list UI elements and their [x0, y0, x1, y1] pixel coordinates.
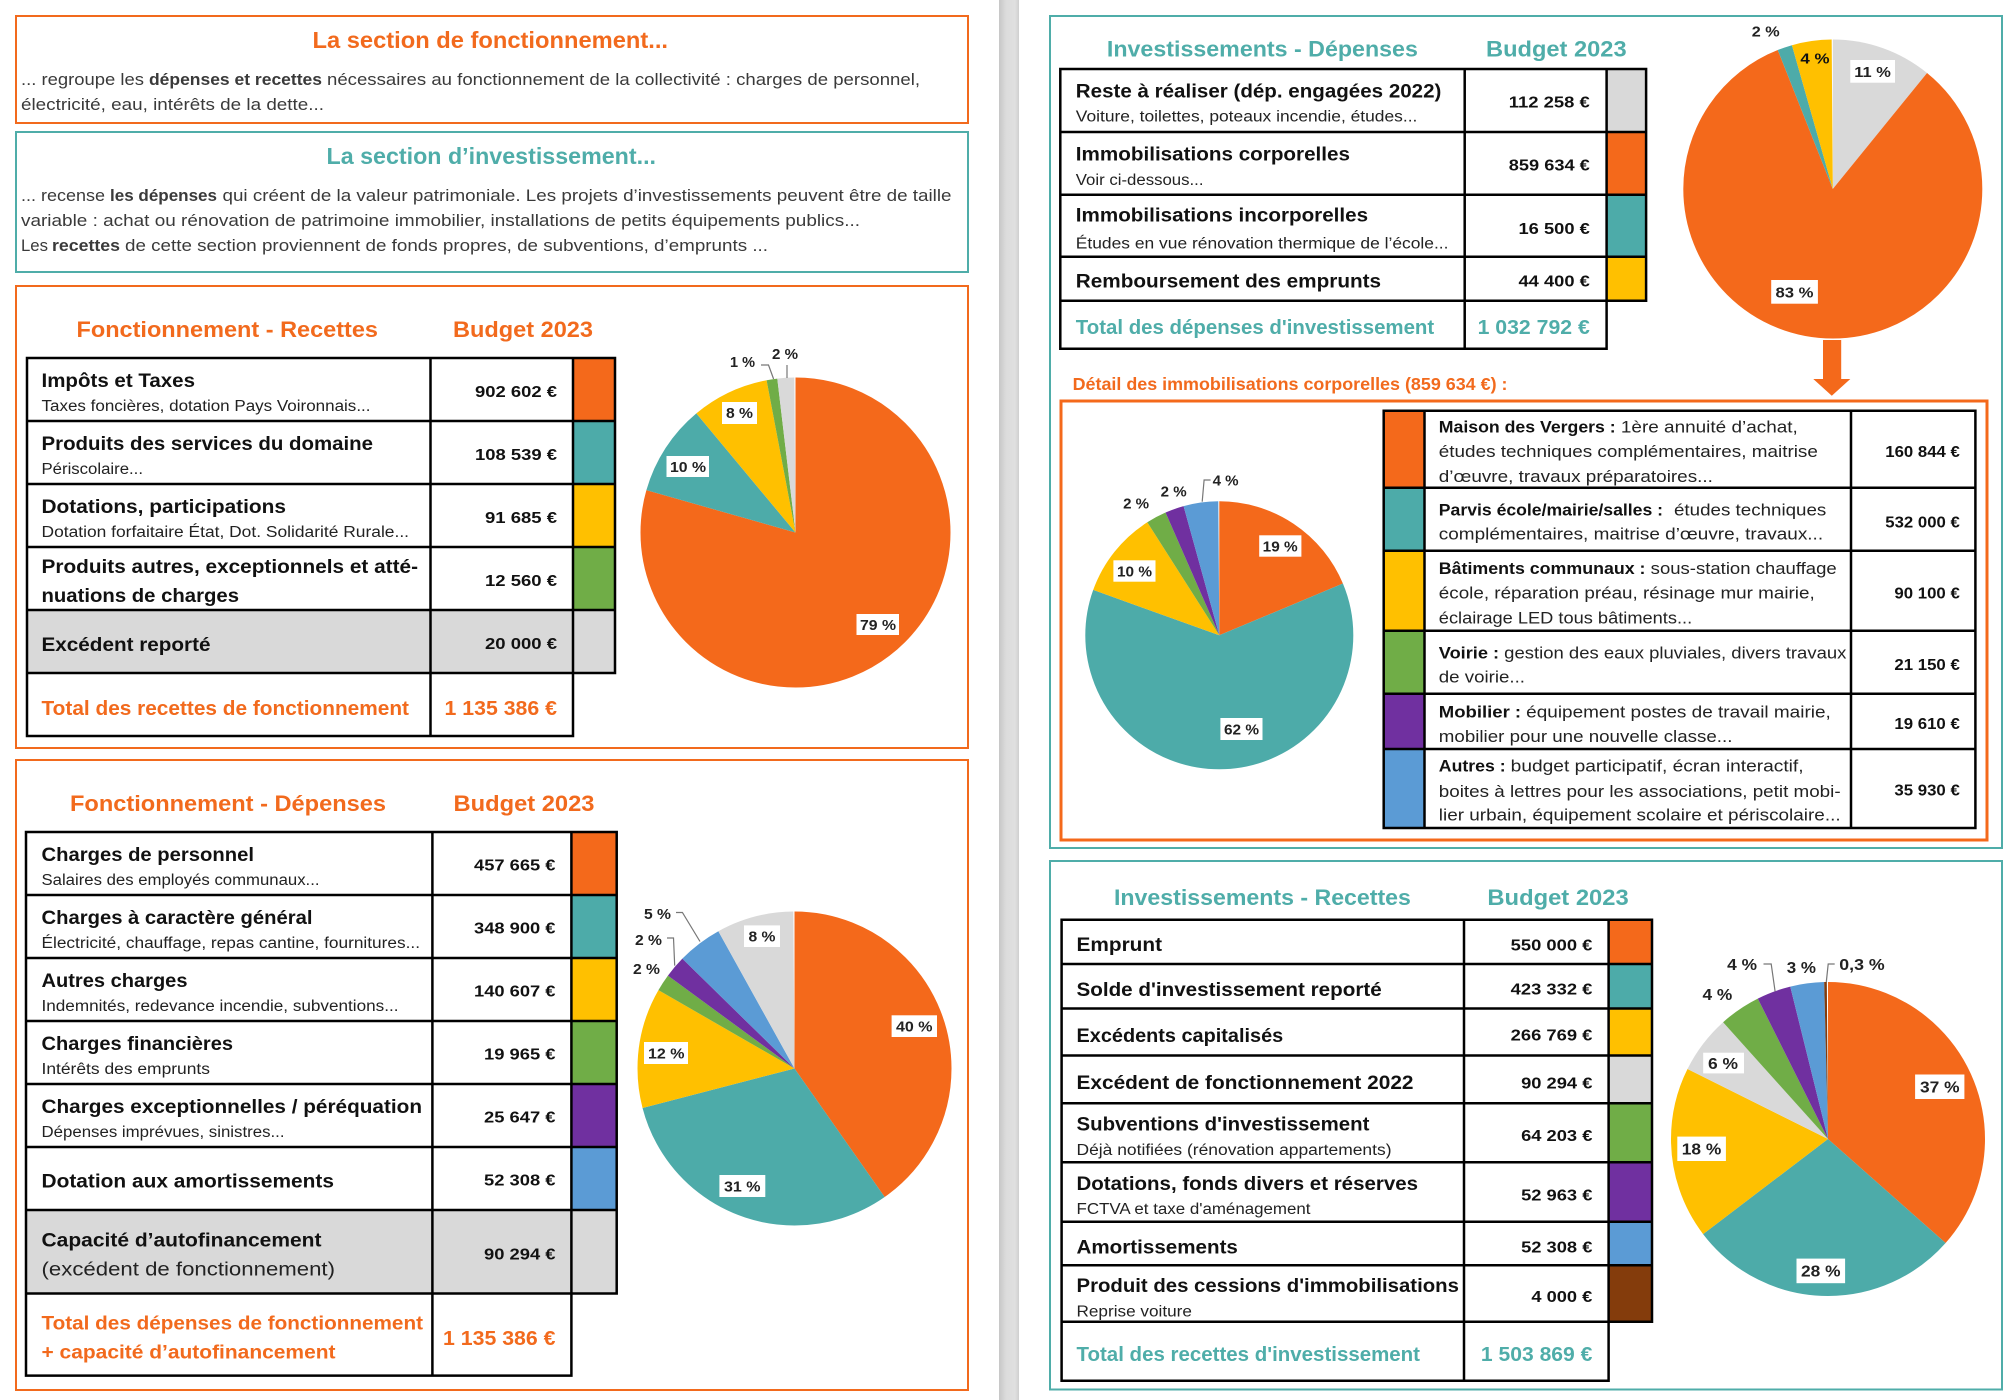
row: parvis école	[1439, 500, 1960, 543]
row: parvis école: Parvis école/mairie/salles :	[1439, 500, 1663, 519]
pie chart: dépenses d'investissement: 11 %	[1854, 64, 1891, 81]
row: autres: 35 930 €	[1894, 783, 1960, 800]
row: charges à caractère général: Électricité, chauffage, repas cantine, fournitures...	[42, 935, 420, 952]
row: total recettes de fonctionnement: 1 135 386 €	[444, 697, 558, 720]
row: dotations, fonds divers: Dotations, fonds divers et réserves	[1076, 1174, 1418, 1195]
row: produits autres	[42, 557, 557, 607]
panel: investissements recettes	[1050, 861, 2002, 1390]
row: mobilier	[1439, 702, 1960, 746]
pie chart: dépenses d'investissement	[1752, 24, 1908, 304]
row: produit des cessions: Produit des cessions d'immobilisations	[1076, 1276, 1459, 1297]
row: mobilier: Mobilier :	[1439, 702, 1521, 721]
row: emprunt	[1076, 935, 1593, 956]
pie chart: dépenses de fonctionnement	[633, 906, 937, 1197]
text block: fonctionnement description: ... regroupe les	[21, 71, 144, 89]
row: total dépenses de fonctionnement: Total des dépenses de fonctionnement	[42, 1312, 424, 1334]
pie chart: recettes de fonctionnement: 10 %	[670, 459, 706, 476]
row: produits autres: 12 560 €	[485, 573, 557, 590]
row: immobilisations corporelles: 859 634 €	[1509, 158, 1590, 175]
pie chart: recettes d'investissement: 37 %	[1920, 1080, 1960, 1096]
row: dotations, fonds divers: 52 963 €	[1521, 1187, 1593, 1204]
pie chart: dépenses de fonctionnement: 12 %	[648, 1046, 684, 1062]
heading: budget 2023: Budget 2023	[1486, 36, 1627, 62]
row: dotation aux amortissements: Dotation aux amortissements	[42, 1172, 334, 1192]
row: bâtiments communaux: Bâtiments communaux :	[1439, 559, 1646, 578]
panel: la section d'investissement	[16, 132, 968, 272]
row: excédent de fonctionnement 2022: 90 294 €	[1521, 1076, 1593, 1092]
row: maison des vergers: d’œuvre, travaux préparatoires...	[1439, 467, 1713, 486]
row: impôts et taxes: 902 602 €	[475, 384, 557, 401]
row: amortissements: Amortissements	[1076, 1237, 1238, 1258]
pie chart: recettes d'investissement: 3 %	[1787, 960, 1816, 977]
row: produits des services: Produits des services du domaine	[42, 434, 373, 455]
pie chart: dépenses de fonctionnement: 2 %	[633, 961, 660, 978]
row: mobilier: mobilier pour une nouvelle classe...	[1439, 727, 1732, 746]
row: voirie: gestion des eaux pluviales, divers travaux	[1504, 643, 1847, 662]
row: remboursement des emprunts: Remboursement des emprunts	[1076, 271, 1381, 292]
row: emprunt: Emprunt	[1076, 935, 1163, 956]
row: reste à réaliser: Voiture, toilettes, poteaux incendie, études...	[1076, 109, 1417, 126]
row: amortissements: 52 308 €	[1521, 1239, 1593, 1256]
row: remboursement des emprunts	[1076, 271, 1590, 292]
row: capacité d'autofinancement: 90 294 €	[484, 1246, 556, 1264]
row: produit des cessions	[1076, 1276, 1592, 1320]
row: total dépenses de fonctionnement: 1 135 386 €	[443, 1327, 556, 1350]
row: charges financières: Intérêts des emprunts	[42, 1061, 210, 1078]
row: immobilisations incorporelles: Immobilisations incorporelles	[1076, 206, 1368, 227]
row: total dépenses d'investissement	[1076, 316, 1590, 339]
row: autres: boites à lettres pour les associations, petit mobi-	[1439, 782, 1841, 801]
text block: investissement description: variable : achat ou rénovation de patrimoine immobilier, installations de petits équipements publics...	[21, 212, 860, 230]
table: dépenses de fonctionnement	[26, 832, 617, 1376]
row: excédents capitalisés: 266 769 €	[1511, 1028, 1593, 1044]
row: total dépenses d'investissement: Total des dépenses d'investissement	[1076, 316, 1434, 339]
table: recettes de fonctionnement	[27, 358, 615, 736]
row: total recettes d'investissement: 1 503 869 €	[1481, 1343, 1593, 1366]
row: bâtiments communaux: éclairage LED tous bâtiments...	[1439, 608, 1692, 627]
row: excédent reporté: 20 000 €	[485, 636, 557, 653]
row: emprunt: 550 000 €	[1511, 937, 1593, 954]
row: immobilisations corporelles: Voir ci-dessous...	[1076, 172, 1204, 189]
row: reste à réaliser: Reste à réaliser (dép. engagées 2022)	[1076, 81, 1441, 102]
panel: fonctionnement recettes	[16, 286, 968, 748]
row: produits des services: 108 539 €	[475, 447, 557, 464]
row: capacité d'autofinancement	[42, 1230, 556, 1280]
pie chart: recettes de fonctionnement: 79 %	[860, 617, 896, 634]
row: voirie: 21 150 €	[1894, 657, 1960, 674]
row: produit des cessions: 4 000 €	[1531, 1289, 1592, 1306]
pie chart: recettes d'investissement	[1677, 957, 1964, 1283]
pie chart: recettes de fonctionnement	[666, 346, 899, 635]
row: dotations, fonds divers	[1076, 1174, 1593, 1218]
heading: budget 2023: Budget 2023	[1487, 885, 1629, 910]
row: solde d'investissement reporté	[1076, 980, 1593, 1001]
pie chart: recettes de fonctionnement: 8 %	[726, 405, 753, 422]
row: dotations: Dotation forfaitaire État, Dot. Solidarité Rurale...	[42, 524, 409, 541]
text block: fonctionnement description	[21, 71, 920, 114]
row: dotations, fonds divers: FCTVA et taxe d'aménagement	[1076, 1201, 1311, 1218]
row: autres: budget participatif, écran interactif,	[1511, 756, 1804, 775]
row: charges à caractère général	[42, 908, 556, 952]
row: mobilier: 19 610 €	[1894, 716, 1960, 733]
text block: investissement description	[21, 187, 952, 255]
row: charges financières: 19 965 €	[484, 1046, 556, 1064]
row: produit des cessions: Reprise voiture	[1076, 1304, 1192, 1320]
pie chart: immobilisations corporelles: 19 %	[1263, 538, 1298, 556]
row: voirie: de voirie...	[1439, 668, 1525, 687]
row: autres	[1439, 756, 1960, 825]
row: immobilisations incorporelles: Études en vue rénovation thermique de l’école...	[1076, 235, 1448, 252]
row: maison des vergers: 160 844 €	[1885, 444, 1960, 461]
heading: budget 2023: Budget 2023	[453, 317, 593, 342]
row: charges à caractère général: 348 900 €	[474, 920, 556, 938]
row: parvis école: études techniques	[1674, 500, 1826, 519]
row: bâtiments communaux: 90 100 €	[1894, 585, 1960, 602]
row: charges de personnel: Salaires des employés communaux...	[42, 872, 320, 889]
table: recettes d'investissement	[1062, 920, 1652, 1381]
text block: investissement description: Les	[21, 237, 48, 255]
row: solde d'investissement reporté: Solde d'investissement reporté	[1076, 980, 1382, 1001]
pie chart: recettes d'investissement: 6 %	[1708, 1056, 1738, 1073]
text block: investissement description: recettes	[52, 237, 120, 255]
heading: fonctionnement dépenses: Fonctionnement - Dépenses	[70, 791, 386, 816]
row: reste à réaliser	[1076, 81, 1590, 126]
row: immobilisations incorporelles: 16 500 €	[1518, 221, 1590, 238]
pie chart: dépenses d'investissement: 2 %	[1752, 24, 1780, 41]
pie chart: recettes d'investissement: 18 %	[1682, 1142, 1721, 1158]
row: autres charges: Autres charges	[42, 971, 188, 992]
row: dotation aux amortissements	[42, 1172, 556, 1192]
heading: budget 2023: Budget 2023	[454, 791, 594, 816]
row: charges à caractère général: Charges à caractère général	[42, 908, 312, 929]
row: dotations: Dotations, participations	[42, 497, 286, 518]
text block: investissement description: les dépenses	[110, 187, 217, 205]
row: dotations	[42, 497, 557, 541]
row: autres charges: 140 607 €	[474, 984, 556, 1000]
heading: section de fonctionnement: La section de fonctionnement...	[312, 27, 668, 53]
panel: détail des immobilisations	[1061, 401, 1987, 840]
text block: fonctionnement description: électricité, eau, intérêts de la dette...	[21, 96, 324, 114]
row: solde d'investissement reporté: 423 332 €	[1511, 982, 1593, 998]
row: subventions d'investissement: 64 203 €	[1521, 1128, 1593, 1145]
row: charges financières: Charges financières	[42, 1034, 233, 1055]
row: immobilisations incorporelles	[1076, 206, 1590, 252]
text block: investissement description: qui créent de la valeur patrimoniale. Les projets d’investissements peuvent être de taille	[222, 187, 952, 205]
row: mobilier: équipement postes de travail mairie,	[1526, 702, 1831, 721]
row: maison des vergers	[1439, 417, 1960, 486]
pie chart: dépenses de fonctionnement: 31 %	[724, 1178, 760, 1196]
text block: investissement description: de cette section proviennent de fonds propres, de subventions, d’emprunts ...	[125, 237, 768, 255]
heading: section d'investissement: La section d’investissement...	[326, 143, 656, 169]
row: immobilisations corporelles	[1076, 145, 1590, 189]
row: excédent reporté	[42, 635, 557, 656]
pie chart: immobilisations corporelles: 4 %	[1213, 473, 1239, 490]
row: capacité d'autofinancement: Capacité d’autofinancement	[42, 1230, 322, 1252]
arrow: vers le détail	[1813, 340, 1850, 396]
row: total recettes d'investissement	[1076, 1343, 1593, 1366]
pie chart: immobilisations corporelles: 10 %	[1117, 564, 1152, 580]
heading: détail des immobilisations corporelles: Détail des immobilisations corporelles (859 634 €) :	[1073, 374, 1508, 394]
pie chart: immobilisations corporelles	[1113, 473, 1301, 740]
row: subventions d'investissement: Subventions d'investissement	[1076, 1114, 1370, 1135]
pie chart: dépenses de fonctionnement: 40 %	[896, 1018, 932, 1036]
row: parvis école: 532 000 €	[1885, 514, 1960, 531]
row: dotations: 91 685 €	[485, 510, 557, 527]
row: impôts et taxes: Taxes foncières, dotation Pays Voironnais...	[42, 398, 370, 415]
row: immobilisations corporelles: Immobilisations corporelles	[1076, 145, 1350, 166]
row: produits des services	[42, 434, 557, 478]
pie chart: immobilisations corporelles: 62 %	[1224, 722, 1259, 738]
row: autres: Autres :	[1439, 756, 1506, 775]
row: impôts et taxes	[42, 371, 557, 415]
row: excédent de fonctionnement 2022	[1076, 1073, 1593, 1094]
panel: fonctionnement dépenses	[16, 760, 968, 1390]
heading: fonctionnement recettes: Fonctionnement - Recettes	[76, 317, 378, 342]
row: excédents capitalisés	[1076, 1026, 1593, 1047]
pie chart: recettes de fonctionnement: 1 %	[730, 354, 755, 371]
row: produits autres: Produits autres, exceptionnels et atté-	[42, 557, 418, 578]
heading: investissements dépenses: Investissements - Dépenses	[1107, 36, 1418, 62]
row: excédent reporté: Excédent reporté	[42, 635, 211, 656]
row: subventions d'investissement: Déjà notifiées (rénovation appartements)	[1076, 1142, 1392, 1159]
text block: fonctionnement description: nécessaires au fonctionnement de la collectivité : charges de personnel,	[327, 71, 920, 89]
row: total dépenses d'investissement: 1 032 792 €	[1478, 316, 1590, 339]
pie chart: recettes d'investissement: 0,3 %	[1839, 957, 1885, 974]
row: bâtiments communaux	[1439, 559, 1960, 627]
row: bâtiments communaux: école, réparation préau, résinage mur mairie,	[1439, 583, 1815, 602]
row: autres: lier urbain, équipement scolaire et périscolaire...	[1439, 806, 1841, 825]
pie chart: dépenses de fonctionnement: 5 %	[644, 906, 671, 923]
row: parvis école: complémentaires, maitrise d’œuvre, travaux...	[1439, 524, 1823, 543]
row: reste à réaliser: 112 258 €	[1509, 95, 1590, 112]
table: dépenses d'investissement	[1060, 69, 1646, 349]
row: dotation aux amortissements: 52 308 €	[484, 1172, 556, 1190]
row: excédent de fonctionnement 2022: Excédent de fonctionnement 2022	[1076, 1073, 1414, 1094]
pie chart: dépenses de fonctionnement: 2 %	[635, 932, 662, 949]
panel: la section de fonctionnement	[16, 16, 968, 123]
row: autres charges: Indemnités, redevance incendie, subventions...	[42, 998, 398, 1015]
row: impôts et taxes: Impôts et Taxes	[42, 371, 195, 392]
row: charges exceptionnelles: Charges exceptionnelles / péréquation	[42, 1097, 422, 1118]
pie chart: dépenses de fonctionnement: 8 %	[748, 928, 776, 946]
row: total dépenses de fonctionnement: + capacité d’autofinancement	[42, 1342, 336, 1364]
row: voirie: Voirie :	[1439, 643, 1499, 662]
row: charges exceptionnelles: Dépenses imprévues, sinistres...	[42, 1124, 284, 1141]
text block: investissement description: ... recense	[21, 187, 105, 205]
panel: investissements dépenses	[1050, 16, 2002, 848]
pie chart: immobilisations corporelles: 2 %	[1161, 484, 1187, 501]
row: charges financières	[42, 1034, 556, 1078]
row: amortissements	[1076, 1237, 1593, 1258]
row: charges de personnel	[42, 845, 556, 889]
table: détail des immobilisations	[1384, 411, 1975, 828]
page gutter	[999, 0, 1019, 1400]
row: maison des vergers: Maison des Vergers :	[1439, 417, 1616, 436]
row: bâtiments communaux: sous-station chauffage	[1651, 559, 1837, 578]
pie chart: dépenses d'investissement: 4 %	[1800, 50, 1830, 67]
pie chart: dépenses d'investissement: 83 %	[1776, 284, 1814, 302]
pie chart: immobilisations corporelles: 2 %	[1123, 495, 1149, 512]
row: maison des vergers: 1ère annuité d’achat,	[1621, 417, 1798, 436]
row: capacité d'autofinancement: (excédent de fonctionnement)	[42, 1260, 335, 1280]
pie chart: recettes d'investissement: 28 %	[1801, 1264, 1840, 1280]
row: charges de personnel: 457 665 €	[474, 858, 556, 874]
text block: fonctionnement description: dépenses et recettes	[149, 71, 322, 89]
heading: investissements recettes: Investissements - Recettes	[1114, 885, 1411, 910]
row: produits des services: Périscolaire...	[42, 461, 143, 478]
row: excédents capitalisés: Excédents capitalisés	[1076, 1026, 1283, 1047]
pie chart: recettes d'investissement: 4 %	[1702, 987, 1732, 1004]
row: produits autres: nuations de charges	[42, 586, 239, 607]
row: voirie	[1439, 643, 1960, 687]
row: autres charges	[42, 971, 556, 1015]
row: charges de personnel: Charges de personnel	[42, 845, 254, 866]
row: subventions d'investissement	[1076, 1114, 1593, 1159]
pie chart: recettes d'investissement: 4 %	[1727, 957, 1757, 974]
pie chart: recettes de fonctionnement: 2 %	[772, 346, 798, 363]
row: charges exceptionnelles	[42, 1097, 556, 1141]
row: charges exceptionnelles: 25 647 €	[484, 1110, 556, 1126]
row: total recettes de fonctionnement: Total des recettes de fonctionnement	[42, 697, 409, 720]
row: total dépenses de fonctionnement	[42, 1312, 556, 1364]
row: total recettes d'investissement: Total des recettes d'investissement	[1076, 1343, 1420, 1366]
row: remboursement des emprunts: 44 400 €	[1518, 274, 1590, 291]
row: maison des vergers: études techniques complémentaires, maitrise	[1439, 442, 1818, 461]
